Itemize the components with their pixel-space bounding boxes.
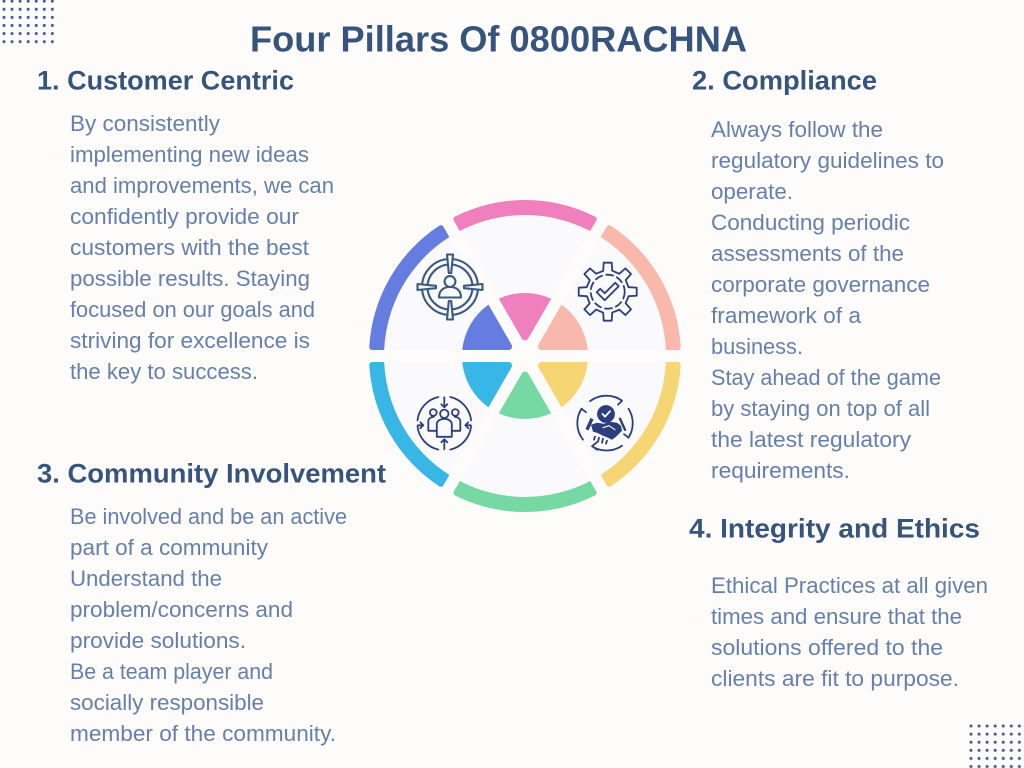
text block: integrity and ethics [711, 573, 988, 691]
text block: compliance: Stay ahead of the game [711, 365, 941, 390]
text block: compliance: operate. [711, 179, 793, 204]
text block: community involvement: part of a community [70, 535, 268, 560]
text block: customer centric: By consistently [70, 111, 220, 136]
icon: customer target [418, 254, 482, 320]
heading: customer centric: 1. Customer Centric [37, 66, 294, 96]
icon: compliance gear [579, 263, 637, 321]
heading: integrity and ethics: 4. Integrity and Ethics [689, 514, 980, 544]
segment: salmon upper right [500, 216, 696, 412]
text block: compliance: Conducting periodic [711, 210, 910, 235]
text block: customer centric: customers with the best [70, 235, 309, 260]
text block: customer centric: and improvements, we can [70, 173, 334, 198]
text block: compliance: business. [711, 334, 803, 359]
segment: indigo upper left [354, 216, 550, 412]
text block: integrity and ethics: solutions offered to the [711, 635, 943, 660]
segment: yellow lower right [500, 300, 696, 496]
segment: blue lower left [354, 300, 550, 496]
text block: customer centric: focused on our goals and [70, 297, 315, 322]
wheel diagram [354, 200, 696, 512]
text block: integrity and ethics: clients are fit to purpose. [711, 666, 959, 691]
heading: compliance: 2. Compliance [692, 66, 877, 96]
dot pattern: bottom right [967, 722, 1024, 768]
text block: customer centric: confidently provide our [70, 204, 299, 229]
text block: customer centric: implementing new ideas [70, 142, 309, 167]
text block: integrity and ethics: Ethical Practices at all given [711, 573, 988, 598]
panel: community involvement [37, 458, 386, 746]
text block: community involvement: problem/concerns and [70, 597, 293, 622]
segment: pink top [453, 200, 597, 344]
icon: integrity handshake [577, 396, 633, 451]
text block: customer centric: possible results. Staying [70, 266, 310, 291]
icon: community people [418, 397, 471, 450]
panel: customer centric [37, 66, 334, 384]
heading: community involvement: 3. Community Involvement [37, 458, 386, 488]
text block: compliance [711, 117, 944, 483]
text block: community involvement: member of the community. [70, 721, 336, 746]
text block: compliance: corporate governance [711, 272, 930, 297]
text block: compliance: regulatory guidelines to [711, 148, 944, 173]
text block: community involvement: Be a team player and [70, 659, 273, 684]
text block: compliance: the latest regulatory [711, 427, 911, 452]
text block: community involvement [70, 504, 347, 746]
text block: customer centric: striving for excellence is [70, 328, 310, 353]
text block: community involvement: Understand the [70, 566, 222, 591]
text block: community involvement: provide solutions. [70, 628, 246, 653]
text block: compliance: requirements. [711, 458, 850, 483]
text block: compliance: Always follow the [711, 117, 883, 142]
text block: compliance: by staying on top of all [711, 396, 930, 421]
text block: integrity and ethics: times and ensure that the [711, 604, 962, 629]
title: Four Pillars Of 0800RACHNA [250, 19, 747, 60]
dot pattern: top left [0, 0, 57, 45]
text block: customer centric: the key to success. [70, 359, 258, 384]
text block: customer centric [70, 111, 334, 384]
text block: compliance: framework of a [711, 303, 862, 328]
text block: community involvement: Be involved and be an active [70, 504, 347, 529]
text block: compliance: assessments of the [711, 241, 904, 266]
text block: community involvement: socially responsible [70, 690, 264, 715]
panel: integrity and ethics [689, 514, 988, 691]
panel: compliance [692, 66, 944, 483]
segment: green bottom [453, 368, 597, 512]
